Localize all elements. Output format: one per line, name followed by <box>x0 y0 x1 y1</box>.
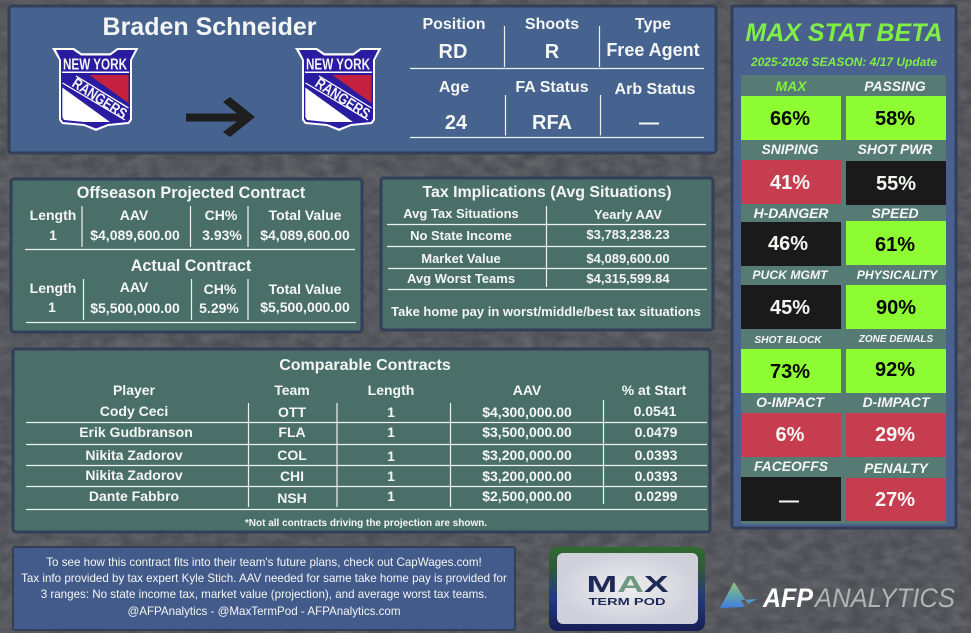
player info table: Type <box>635 16 671 33</box>
panel: comparable contracts <box>13 349 710 532</box>
comparables table: 1 <box>387 404 395 420</box>
heading: actual contract: Actual Contract <box>131 257 252 275</box>
stat: physicality: PHYSICALITY <box>857 268 939 282</box>
panel: footer notes: 3 ranges: No state income tax, market value (projection), and average worst tax teams. <box>41 588 487 601</box>
stat: offensive impact: 6% <box>776 424 805 446</box>
player info table: — <box>639 112 659 134</box>
panel: footer notes: To see how this contract fits into their team's future plans, check out CapWages.com! <box>46 556 482 569</box>
stat: faceoffs: FACEOFFS <box>754 458 829 474</box>
tax table: $4,089,600.00 <box>586 251 670 266</box>
stat: max: MAX <box>776 78 807 94</box>
panel: footer notes: Tax info provided by tax expert Kyle Stich. AAV needed for same take home pay is provided for <box>21 572 507 585</box>
stat: faceoffs <box>741 458 841 521</box>
comparables table: 1 <box>387 488 395 504</box>
logo: AFP Analytics: ANALYTICS <box>813 583 955 613</box>
actual contract table: Length <box>30 280 76 296</box>
stat: high danger: 46% <box>768 233 808 255</box>
stat: puck management: 45% <box>770 297 810 319</box>
player info table: Arb Status <box>615 81 696 98</box>
actual contract table <box>26 279 356 322</box>
comparables table: Erik Gudbranson <box>79 424 193 440</box>
stat: penalty <box>846 460 946 521</box>
projected contract table: Total Value <box>269 207 342 223</box>
tax table: Yearly AAV <box>594 207 662 222</box>
icon: New York Rangers logo (from team): RANGERS <box>69 75 130 123</box>
stat: defensive impact: D-IMPACT <box>863 394 931 410</box>
stat: physicality <box>846 268 946 329</box>
stat: zone denials <box>846 334 946 393</box>
icon: New York Rangers logo (from team): NEW YORK <box>63 56 127 74</box>
icon: New York Rangers logo (from team) <box>52 48 138 131</box>
comparables table: 1 <box>387 448 395 464</box>
player info table: RD <box>439 41 467 63</box>
comparables table: $4,300,000.00 <box>482 404 572 420</box>
comparables table: Cody Ceci <box>100 403 168 419</box>
player info table: FA Status <box>515 79 589 96</box>
footnote: *Not all contracts driving the projection are shown. <box>245 518 487 529</box>
stat: sniping: SNIPING <box>761 141 819 157</box>
panel: footer notes <box>13 547 515 630</box>
logo: Max Term Pod <box>549 547 705 631</box>
actual contract table: $5,500,000.00 <box>260 299 350 315</box>
comparables table: $3,200,000.00 <box>482 447 572 463</box>
tax table: Avg Tax Situations <box>403 206 519 221</box>
stat: speed <box>846 205 946 265</box>
panel: tax implications <box>381 178 713 330</box>
comparables table: NSH <box>277 490 307 506</box>
panel: footer notes: @AFPAnalytics - @MaxTermPod - AFPAnalytics.com <box>127 605 401 618</box>
arrow: team change <box>186 97 255 137</box>
comparables table: Nikita Zadorov <box>85 447 183 463</box>
stat: shot power <box>846 141 946 205</box>
stat: defensive impact: 29% <box>875 424 915 446</box>
stat: penalty: 27% <box>875 489 915 511</box>
comparables table: Length <box>368 382 414 398</box>
comparables table: Team <box>274 382 310 398</box>
stat: defensive impact <box>846 394 946 457</box>
actual contract table: Total Value <box>269 281 342 297</box>
stat: sniping <box>741 141 841 204</box>
player info table: Free Agent <box>606 40 700 60</box>
stat grid background <box>741 75 946 524</box>
player info table: R <box>545 41 560 63</box>
comparables table <box>26 382 707 510</box>
tax table: Avg Worst Teams <box>407 271 515 286</box>
comparables table: Player <box>113 382 156 398</box>
comparables table: $3,500,000.00 <box>482 424 572 440</box>
comparables table: 1 <box>387 468 395 484</box>
comparables table: 0.0541 <box>634 403 677 419</box>
comparables table: Nikita Zadorov <box>85 467 183 483</box>
projected contract table: $4,089,600.00 <box>90 227 180 243</box>
stat: offensive impact: O-IMPACT <box>756 394 825 410</box>
actual contract table: $5,500,000.00 <box>90 300 180 316</box>
comparables table: 0.0393 <box>635 468 678 484</box>
icon: New York Rangers logo (to team) <box>295 48 382 131</box>
icon: New York Rangers logo (to team): NEW YORK <box>306 56 370 74</box>
player name: Braden Schneider <box>103 13 317 41</box>
stat: passing: PASSING <box>864 78 926 94</box>
stat: zone denials: ZONE DENIALS <box>858 334 934 345</box>
stat: max <box>741 78 841 140</box>
logo: Max Term Pod: M A X <box>586 571 670 597</box>
stat: shot block: 73% <box>770 361 810 383</box>
comparables table: 1 <box>387 424 395 440</box>
actual contract table: 5.29% <box>199 300 239 316</box>
season subtitle: 2025-2026 SEASON: 4/17 Update <box>750 55 937 69</box>
stat: passing <box>846 78 946 140</box>
comparables table: 0.0479 <box>635 424 678 440</box>
stat: passing: 58% <box>875 108 915 130</box>
logo: Max Term Pod: TERM POD <box>588 596 666 608</box>
projected contract table: CH% <box>205 207 238 223</box>
player info table: Position <box>422 16 486 33</box>
stat: shot power: 55% <box>876 173 916 195</box>
icon: New York Rangers logo (to team): RANGERS <box>312 75 373 123</box>
comparables table: CHI <box>280 468 304 484</box>
tax table: No State Income <box>410 228 512 243</box>
heading: comparable contracts: Comparable Contracts <box>279 357 451 374</box>
heading: max stat beta: MAX STAT BETA <box>745 19 943 47</box>
projected contract table: Length <box>30 207 76 223</box>
logo: AFP Analytics <box>720 582 955 613</box>
stat: sniping: 41% <box>770 172 810 194</box>
player info table: 24 <box>445 112 468 134</box>
stat: shot power: SHOT PWR <box>858 141 932 157</box>
comparables table: $2,500,000.00 <box>482 488 572 504</box>
comparables table: OTT <box>278 404 306 420</box>
actual contract table: 1 <box>48 299 56 315</box>
projected contract table <box>25 206 355 250</box>
comparables table: 0.0393 <box>635 447 678 463</box>
stat: speed: 61% <box>875 234 915 256</box>
stat: max: 66% <box>770 108 810 130</box>
stat: puck management <box>741 268 841 329</box>
comparables table: 0.0299 <box>635 488 678 504</box>
comparables table: FLA <box>278 424 306 440</box>
tax table: Market Value <box>421 251 501 266</box>
stat: shot block: SHOT BLOCK <box>754 335 822 346</box>
stat: high danger: H-DANGER <box>754 205 828 221</box>
comparables table: % at Start <box>622 382 687 398</box>
player info table: RFA <box>532 112 572 134</box>
stat: offensive impact <box>741 394 841 457</box>
tax note: Take home pay in worst/middle/best tax situations <box>391 304 701 319</box>
comparables table: COL <box>277 447 307 463</box>
stat: physicality: 90% <box>876 297 916 319</box>
player info table: Age <box>439 79 469 96</box>
projected contract table: AAV <box>120 207 149 223</box>
stat: puck management: PUCK MGMT <box>752 268 829 282</box>
logo: AFP Analytics: AFP <box>762 583 814 613</box>
heading: tax implications: Tax Implications (Avg Situations) <box>423 184 671 201</box>
stat: zone denials: 92% <box>875 359 915 381</box>
stat: high danger <box>741 205 841 266</box>
stat: speed: SPEED <box>871 205 919 221</box>
actual contract table: AAV <box>120 279 149 295</box>
panel: max stat beta <box>732 6 956 528</box>
actual contract table: CH% <box>204 281 237 297</box>
player info table: Shoots <box>525 16 579 33</box>
comparables table: $3,200,000.00 <box>482 468 572 484</box>
projected contract table: 3.93% <box>202 227 242 243</box>
projected contract table: 1 <box>49 227 57 243</box>
tax table <box>387 206 707 290</box>
stat: shot block <box>741 335 841 393</box>
comparables table: AAV <box>513 382 542 398</box>
stat: penalty: PENALTY <box>864 460 930 476</box>
player info table <box>410 16 704 138</box>
panel: contracts <box>11 179 362 332</box>
panel: player header <box>9 6 716 153</box>
projected contract table: $4,089,600.00 <box>260 227 350 243</box>
tax table: $3,783,238.23 <box>586 227 670 242</box>
comparables table: Dante Fabbro <box>89 488 179 504</box>
tax table: $4,315,599.84 <box>586 271 670 286</box>
heading: offseason projected contract: Offseason Projected Contract <box>77 184 306 202</box>
stat: faceoffs: — <box>779 490 799 512</box>
